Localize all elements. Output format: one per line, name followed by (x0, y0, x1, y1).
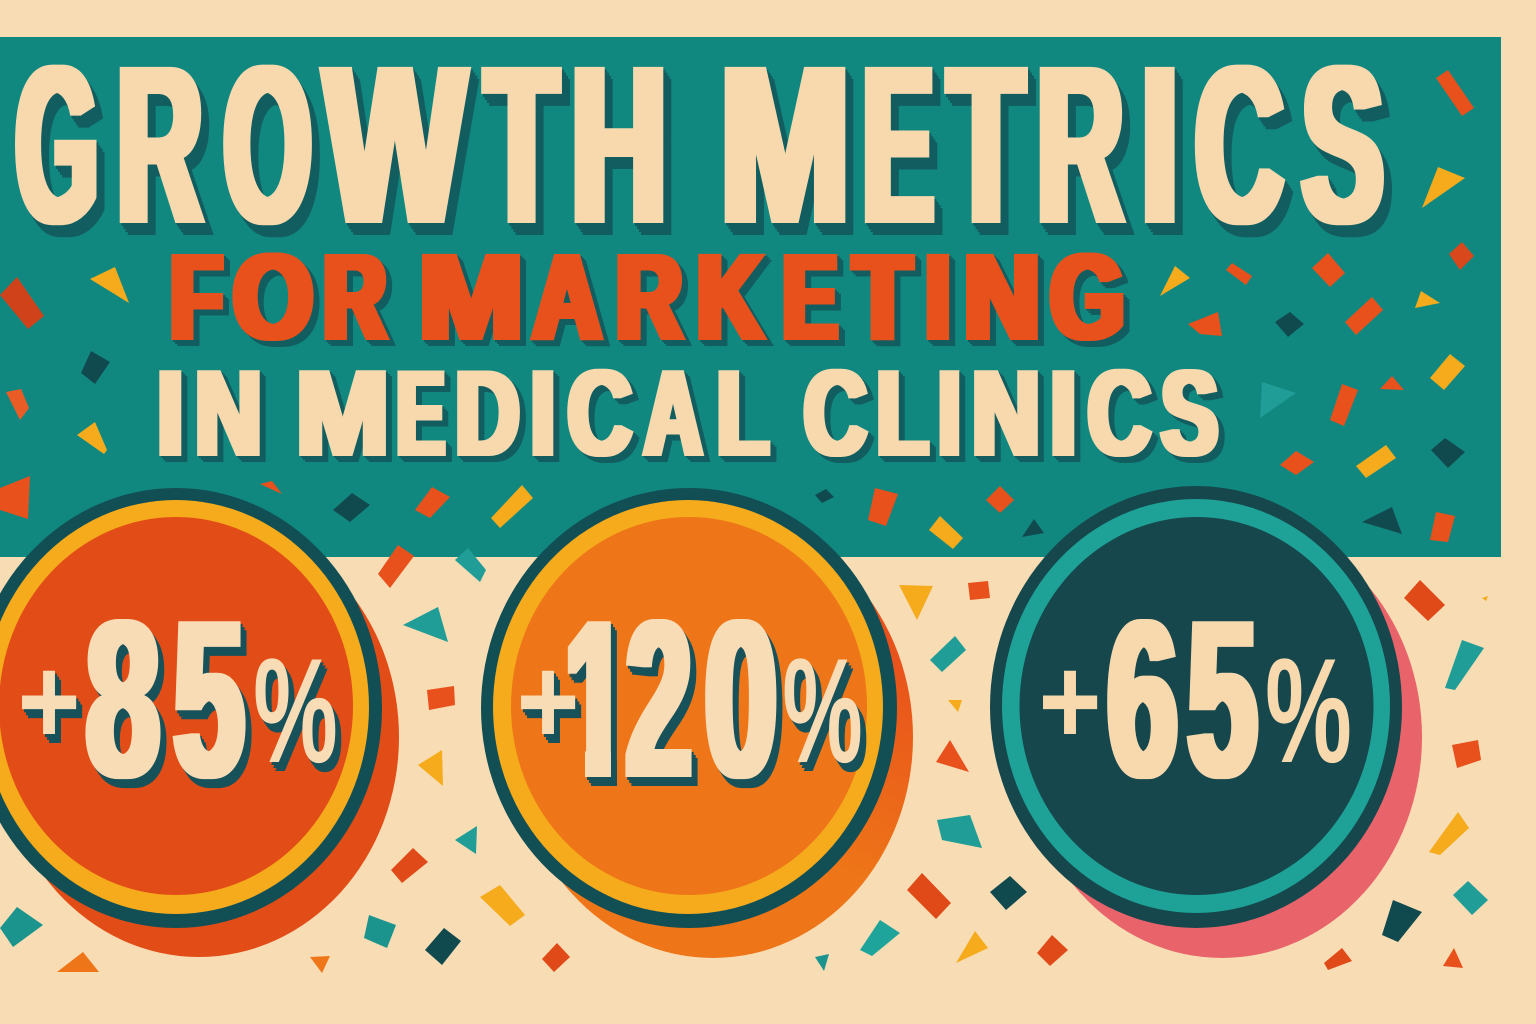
title: Growth Metrics: S (1302, 20, 1383, 270)
title: Growth Metrics: T (948, 20, 1024, 270)
value: +120%: + (516, 633, 580, 771)
title: Growth Metrics: T (485, 20, 558, 270)
title: Growth Metrics: M (720, 20, 850, 270)
value: +120%: 2 (626, 576, 692, 824)
subtitle: In Medical Clinics: I (938, 345, 960, 481)
title: Growth Metrics: W (324, 20, 466, 270)
subtitle: In Medical Clinics: N (972, 345, 1040, 481)
value: +85%: % (253, 627, 338, 794)
subtitle: For Marketing: R (616, 228, 682, 364)
value: +65%: + (1038, 633, 1102, 771)
subtitle: In Medical Clinics: E (397, 345, 445, 481)
subtitle: In Medical Clinics: I (1050, 345, 1076, 481)
metric badge: +120% (481, 488, 913, 958)
metric badge: +85% (0, 488, 399, 957)
subtitle: For Marketing: A (533, 228, 601, 364)
value: +120%: 1 (565, 576, 627, 824)
title: Growth Metrics (16, 20, 1383, 270)
subtitle: For Marketing: R (324, 228, 386, 364)
subtitle: In Medical Clinics (157, 345, 1218, 481)
subtitle: In Medical Clinics: A (644, 345, 702, 481)
subtitle: In Medical Clinics: C (1088, 345, 1151, 481)
subtitle: In Medical Clinics: I (157, 345, 183, 481)
value: +85%: 8 (86, 576, 160, 824)
title: Growth Metrics: R (1037, 20, 1123, 270)
value: +120%: 0 (705, 576, 777, 824)
subtitle: For Marketing: I (926, 228, 950, 364)
title: Growth Metrics: H (571, 20, 667, 270)
title: Growth Metrics: I (1142, 20, 1178, 270)
subtitle: For Marketing: M (419, 228, 523, 364)
subtitle: For Marketing: F (171, 228, 222, 364)
value: +85%: 5 (174, 576, 244, 824)
title: Growth Metrics: E (863, 20, 933, 270)
value: +65%: 6 (1107, 576, 1178, 824)
subtitle: In Medical Clinics: S (1161, 345, 1218, 481)
subtitle: For Marketing: K (697, 228, 762, 364)
value: +120%: % (782, 627, 863, 794)
subtitle: In Medical Clinics: L (877, 345, 928, 481)
title: Growth Metrics: O (224, 20, 311, 270)
subtitle: In Medical Clinics: D (456, 345, 519, 481)
subtitle: In Medical Clinics: C (804, 345, 867, 481)
value: +65% (1038, 576, 1352, 824)
metric badge: +65% (990, 486, 1422, 958)
value: +65%: % (1265, 627, 1352, 794)
value: +85%: + (18, 633, 80, 771)
subtitle: For Marketing: T (854, 228, 911, 364)
subtitle: For Marketing: N (964, 228, 1040, 364)
subtitle: For Marketing: G (1051, 228, 1124, 364)
subtitle: For Marketing: E (783, 228, 837, 364)
value: +65%: 5 (1188, 576, 1257, 824)
confetti: on banner (0, 70, 1474, 549)
value: +85% (18, 576, 338, 824)
subtitle: In Medical Clinics: I (531, 345, 555, 481)
subtitle: In Medical Clinics: C (568, 345, 632, 481)
title: Growth Metrics: R (117, 20, 202, 270)
subtitle: For Marketing (171, 228, 1124, 364)
confetti: on cream background (0, 545, 1488, 973)
subtitle: In Medical Clinics: N (195, 345, 262, 481)
title: Growth Metrics: C (1195, 20, 1283, 270)
teal title banner (0, 37, 1501, 557)
subtitle: In Medical Clinics: L (717, 345, 767, 481)
title: Growth Metrics: G (16, 20, 98, 270)
subtitle: In Medical Clinics: M (296, 345, 389, 481)
subtitle: For Marketing: O (234, 228, 313, 364)
value: +120% (521, 619, 866, 788)
